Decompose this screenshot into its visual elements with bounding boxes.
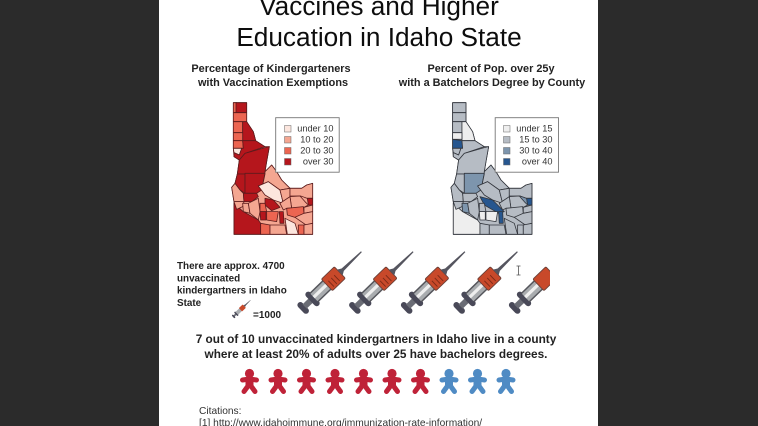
heading: kindergarten exemptions map xyxy=(191,63,351,89)
heading: kindergarten exemptions map: with Vaccination Exemptions xyxy=(197,77,348,89)
white poster panel xyxy=(159,0,598,426)
text block: unvaccinated count: unvaccinated xyxy=(177,274,240,284)
statement: 7 out of 10: 7 out of 10 unvaccinated kindergartners in Idaho live in a county xyxy=(196,332,557,346)
legend: bachelors degree: over 40 xyxy=(522,156,552,166)
map: bachelors degree by county xyxy=(451,103,532,234)
icon: red person 1 xyxy=(242,369,256,392)
legend: bachelors degree: 15 to 30 xyxy=(519,134,552,144)
map: vaccination exemptions by county xyxy=(232,103,313,234)
icon: partial syringe 5 xyxy=(508,266,550,314)
legend: bachelors degree: under 15 xyxy=(516,124,552,134)
icon: syringe 3 xyxy=(400,251,466,314)
text block: unvaccinated count: There are approx. 4700 xyxy=(177,261,285,272)
icon: red person 6 xyxy=(385,369,399,392)
icon: red person 5 xyxy=(356,369,370,392)
text block: unvaccinated count: kindergartners in Idaho xyxy=(177,286,287,296)
icon: syringe 4 xyxy=(453,251,518,314)
legend: exemptions: under 10 xyxy=(297,124,334,134)
icon: red person 4 xyxy=(328,369,342,392)
pictogram: syringes representing 4700 children xyxy=(297,251,550,314)
text block: unvaccinated count: State xyxy=(177,298,202,309)
key label: one syringe equals 1000: =1000 xyxy=(253,310,282,321)
citations xyxy=(199,406,482,426)
heading: bachelors degree map xyxy=(398,63,585,89)
legend: exemptions xyxy=(276,118,339,172)
heading: bachelors degree map: with a Batchelors Degree by County xyxy=(398,77,585,89)
icon: red person 3 xyxy=(300,369,314,392)
statement: 7 out of 10 xyxy=(196,332,557,361)
heading: bachelors degree map: Percent of Pop. over 25y xyxy=(427,63,555,75)
title xyxy=(236,0,522,52)
citations: Citations: xyxy=(199,406,241,417)
icon: red person 2 xyxy=(271,369,285,392)
legend: exemptions: 20 to 30 xyxy=(300,146,334,156)
pictogram: 7 red and 3 blue children xyxy=(242,369,513,392)
statement: 7 out of 10: where at least 20% of adults over 25 have bachelors degrees. xyxy=(204,347,547,361)
text block: unvaccinated count xyxy=(177,261,287,309)
icon: syringe 1 xyxy=(297,251,362,314)
legend: bachelors degree xyxy=(495,118,558,172)
legend: exemptions: over 30 xyxy=(303,156,334,166)
icon: blue person 2 xyxy=(470,369,484,392)
icon: blue person 1 xyxy=(442,369,456,392)
legend: bachelors degree: 30 to 40 xyxy=(519,146,552,156)
title: Education in Idaho State xyxy=(236,22,522,52)
icon: small syringe key xyxy=(231,298,252,319)
heading: kindergarten exemptions map: Percentage of Kindergarteners xyxy=(191,63,351,75)
icon: blue person 3 xyxy=(499,369,513,392)
icon: red person 7 xyxy=(414,369,428,392)
icon: syringe 2 xyxy=(349,251,414,314)
icon: text cursor xyxy=(516,266,520,275)
legend: exemptions: 10 to 20 xyxy=(300,134,334,144)
